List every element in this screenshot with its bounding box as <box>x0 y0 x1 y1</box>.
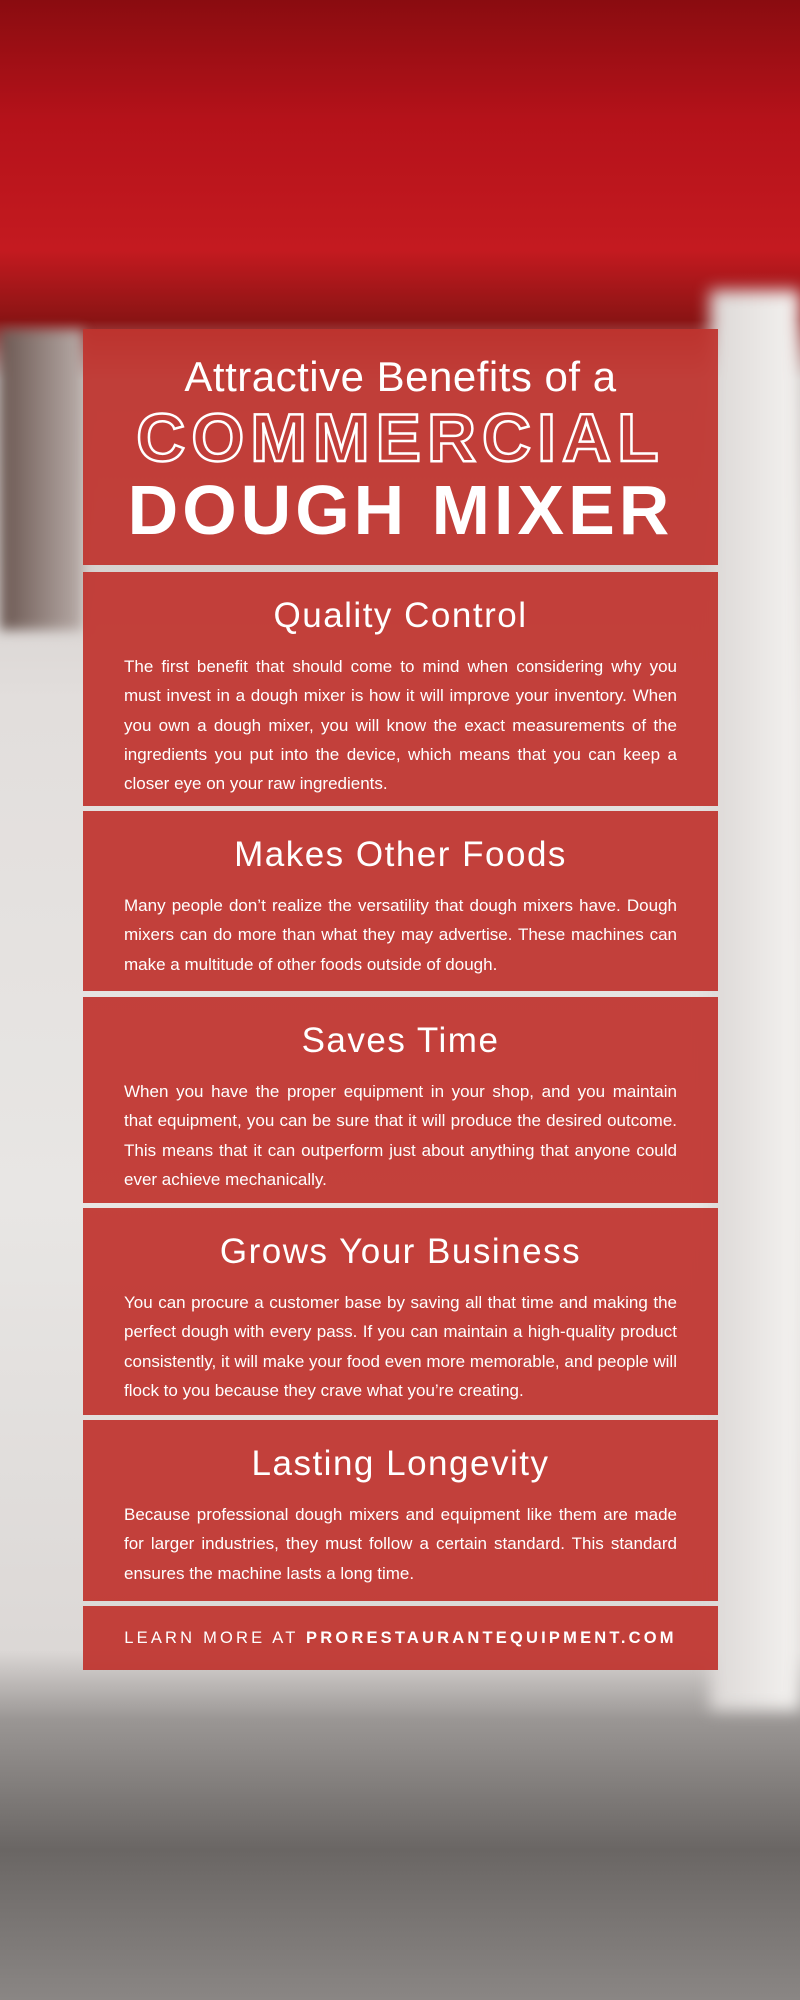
panel: quality control: Quality Control <box>274 596 527 635</box>
footer: LEARN MORE AT PRORESTAURANTEQUIPMENT.COM <box>124 1629 677 1647</box>
panel: saves time: When you have the proper equipment in your shop, and you maintain that equipment, you can be sure that it will produce the desired outcome. This means that it can outperform just about anything that anyone could ever achieve mechanically. <box>124 1082 677 1189</box>
subtitle: Attractive Benefits of a <box>184 353 617 400</box>
panel: grows your business: You can procure a customer base by saving all that time and making the perfect dough with every pass. If you can maintain a high-quality product consistently, it will make your food even more memorable, and people will flock to you because they crave what you’re creating. <box>124 1293 677 1400</box>
title panel <box>83 329 718 565</box>
panel: lasting longevity: Because professional dough mixers and equipment like them are made for larger industries, they must follow a certain standard. This standard ensures the machine lasts a long time. <box>124 1505 677 1583</box>
panel: quality control <box>83 572 718 806</box>
panel: makes other foods <box>83 811 718 991</box>
title bold: DOUGH MIXER <box>128 471 673 549</box>
panel: saves time: Saves Time <box>302 1021 499 1060</box>
panel: saves time <box>83 997 718 1203</box>
footer <box>83 1606 718 1670</box>
panel: lasting longevity: Lasting Longevity <box>252 1444 549 1483</box>
panel: grows your business <box>83 1208 718 1415</box>
panel: makes other foods: Many people don’t realize the versatility that dough mixers have. Dough mixers can do more than what they may advertise. These machines can make a multitude of other foods outside of dough. <box>124 896 677 974</box>
panel: lasting longevity <box>83 1420 718 1601</box>
panel: grows your business: Grows Your Business <box>220 1232 581 1271</box>
panel: makes other foods: Makes Other Foods <box>234 835 567 874</box>
panel: quality control: The first benefit that should come to mind when considering why you must invest in a dough mixer is how it will improve your inventory. When you own a dough mixer, you will know the exact measurements of the ingredients you put into the device, which means that you can keep a closer eye on your raw ingredients. <box>124 657 677 793</box>
